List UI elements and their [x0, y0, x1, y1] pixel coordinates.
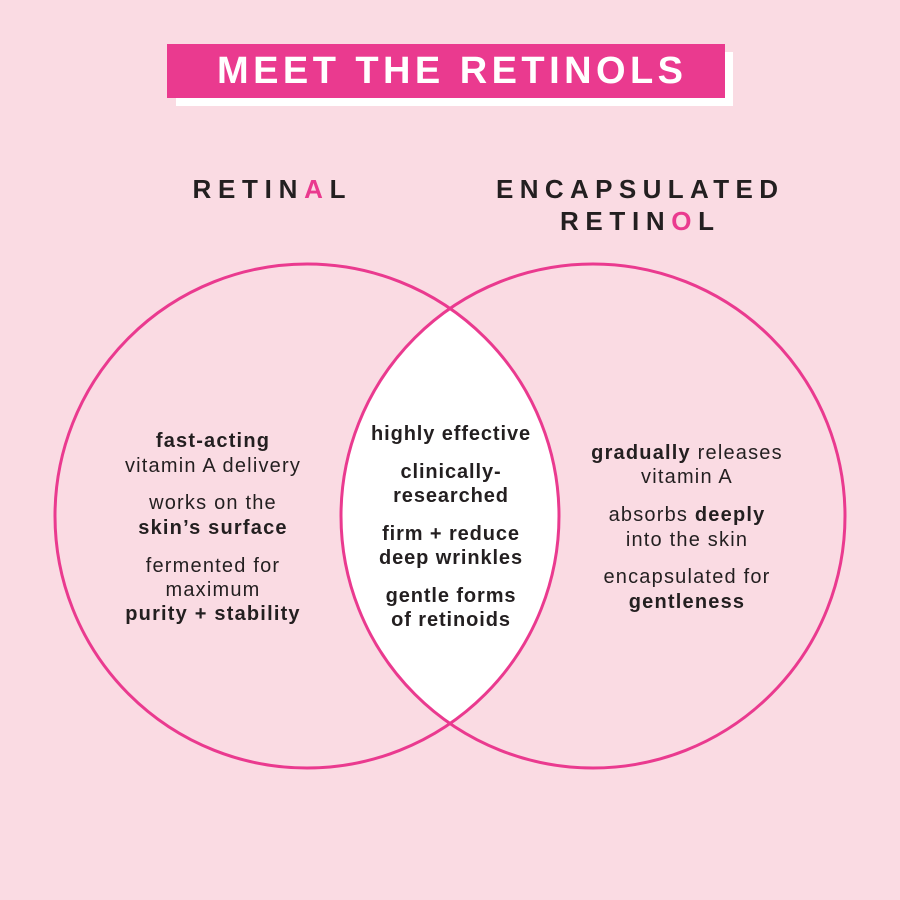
heading: encapsulated retinol: ENCAPSULATED [496, 174, 778, 204]
text: shared benefits: firm + reduce [382, 523, 520, 545]
text: shared benefits: clinically- [400, 461, 502, 483]
text: encapsulated retinol benefits: into the skin [626, 529, 748, 551]
text: encapsulated retinol benefits: gentleness [629, 591, 745, 613]
heading: encapsulated retinol [496, 174, 778, 236]
text: encapsulated retinol benefits: gradually releases [591, 442, 783, 464]
text: shared benefits: gentle forms [386, 585, 516, 607]
text: shared benefits: highly effective [371, 423, 531, 445]
text: retinal benefits: fermented for [146, 555, 280, 577]
text: shared benefits: of retinoids [391, 609, 511, 631]
text: encapsulated retinol benefits: encapsulated for [603, 566, 771, 588]
text: shared benefits: researched [393, 485, 509, 507]
text: retinal benefits: works on the [148, 492, 277, 514]
title banner [167, 44, 733, 106]
heading: retinal: RETIN A L [192, 174, 346, 204]
title banner: MEET THE RETINOLS [217, 50, 683, 92]
text: encapsulated retinol benefits: absorbs deeply [609, 504, 765, 526]
text: retinal benefits: skin’s surface [138, 517, 288, 539]
text: retinal benefits: fast-acting [156, 430, 270, 452]
text: shared benefits [371, 423, 531, 631]
text: retinal benefits: purity + stability [125, 603, 301, 625]
text: retinal benefits [125, 430, 301, 625]
heading: encapsulated retinol: RETIN O L [560, 206, 714, 236]
text: shared benefits: deep wrinkles [379, 547, 523, 569]
text: retinal benefits: maximum [165, 579, 261, 601]
text: retinal benefits: vitamin A delivery [125, 455, 301, 477]
text: encapsulated retinol benefits [591, 442, 783, 613]
text: encapsulated retinol benefits: vitamin A [641, 466, 733, 488]
venn diagram [55, 264, 845, 768]
